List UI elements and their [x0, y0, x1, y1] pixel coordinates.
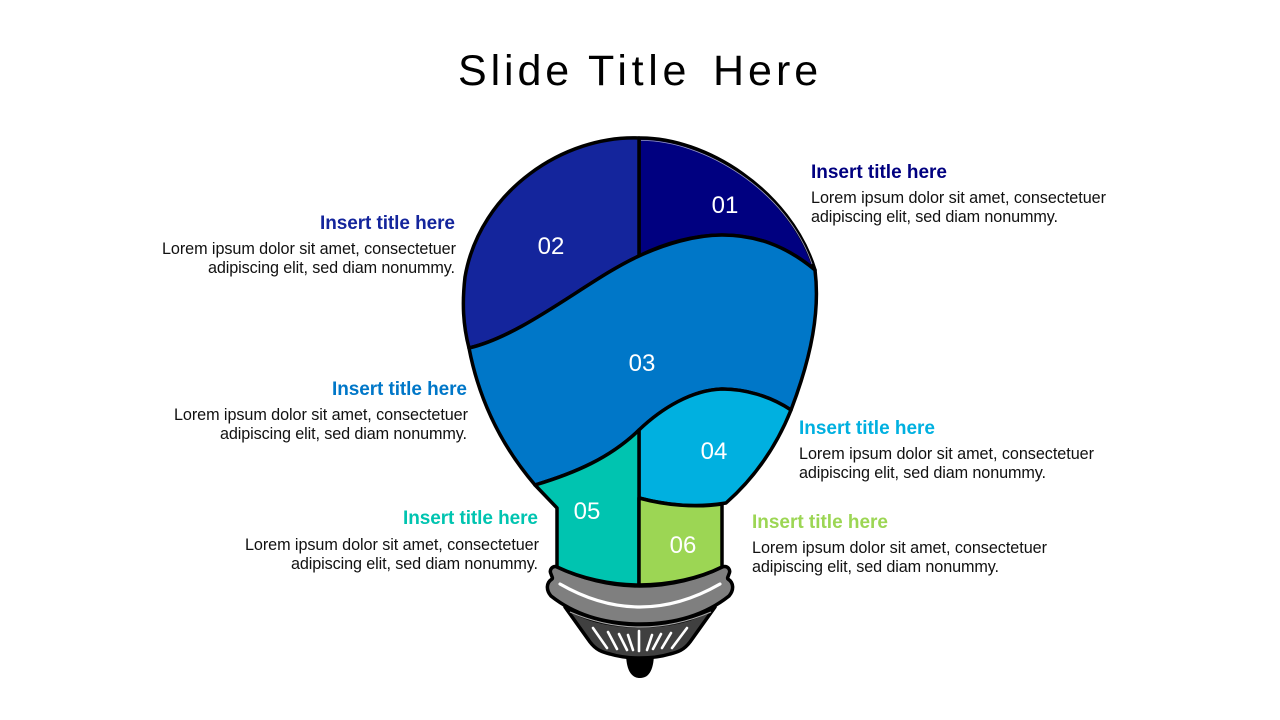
- base lower cap: [565, 607, 715, 658]
- collar highlight: [560, 584, 720, 607]
- callout 02: [162, 213, 457, 277]
- callout 01: [811, 162, 1107, 226]
- callout 06: Insert title here: [752, 512, 888, 533]
- callout 06: adipiscing elit, sed diam nonummy.: [752, 558, 999, 576]
- callout 06: Lorem ipsum dolor sit amet, consectetuer: [752, 539, 1048, 557]
- segment 02: 02: [538, 233, 564, 260]
- callout 01: Lorem ipsum dolor sit amet, consectetuer: [811, 189, 1107, 207]
- segment 06: [639, 498, 722, 585]
- title: Here: [713, 47, 822, 95]
- callout 03: adipiscing elit, sed diam nonummy.: [220, 425, 467, 443]
- segment 05: 05: [574, 498, 600, 525]
- segment 03: 03: [629, 350, 655, 377]
- callout 04: Lorem ipsum dolor sit amet, consectetuer: [799, 445, 1095, 463]
- callout 06: [752, 512, 1048, 576]
- segment 05: [535, 430, 639, 585]
- icon: bulb base: [547, 567, 733, 678]
- callout 01: adipiscing elit, sed diam nonummy.: [811, 208, 1058, 226]
- base contact tip: [626, 652, 654, 678]
- cap ridges: [593, 628, 687, 651]
- segment 04: 04: [701, 438, 727, 465]
- callout 02: Lorem ipsum dolor sit amet, consectetuer: [162, 240, 457, 258]
- title: Slide: [458, 47, 589, 95]
- callout 05: Insert title here: [403, 508, 538, 529]
- callout 05: [245, 508, 540, 573]
- segment 01: 01: [712, 192, 738, 219]
- segment 01: [639, 138, 815, 270]
- callout 04: [799, 418, 1095, 482]
- segment 06: 06: [670, 532, 696, 559]
- callout 02: adipiscing elit, sed diam nonummy.: [208, 259, 455, 277]
- callout 05: adipiscing elit, sed diam nonummy.: [291, 555, 538, 573]
- segment 04: [639, 389, 791, 505]
- callout 02: Insert title here: [320, 213, 455, 234]
- callout 05: Lorem ipsum dolor sit amet, consectetuer: [245, 536, 540, 554]
- callout 04: adipiscing elit, sed diam nonummy.: [799, 464, 1046, 482]
- segment 03: [469, 235, 816, 485]
- callout 03: Insert title here: [332, 379, 467, 400]
- cap rim highlight: [570, 612, 711, 627]
- light bulb diagram: [463, 138, 816, 678]
- title: Title: [588, 47, 708, 95]
- callout 01: Insert title here: [811, 162, 947, 183]
- segment 02: [463, 138, 639, 348]
- callout 03: [174, 379, 469, 443]
- callout 03: Lorem ipsum dolor sit amet, consectetuer: [174, 406, 469, 424]
- base collar: [547, 567, 733, 624]
- callout 04: Insert title here: [799, 418, 935, 439]
